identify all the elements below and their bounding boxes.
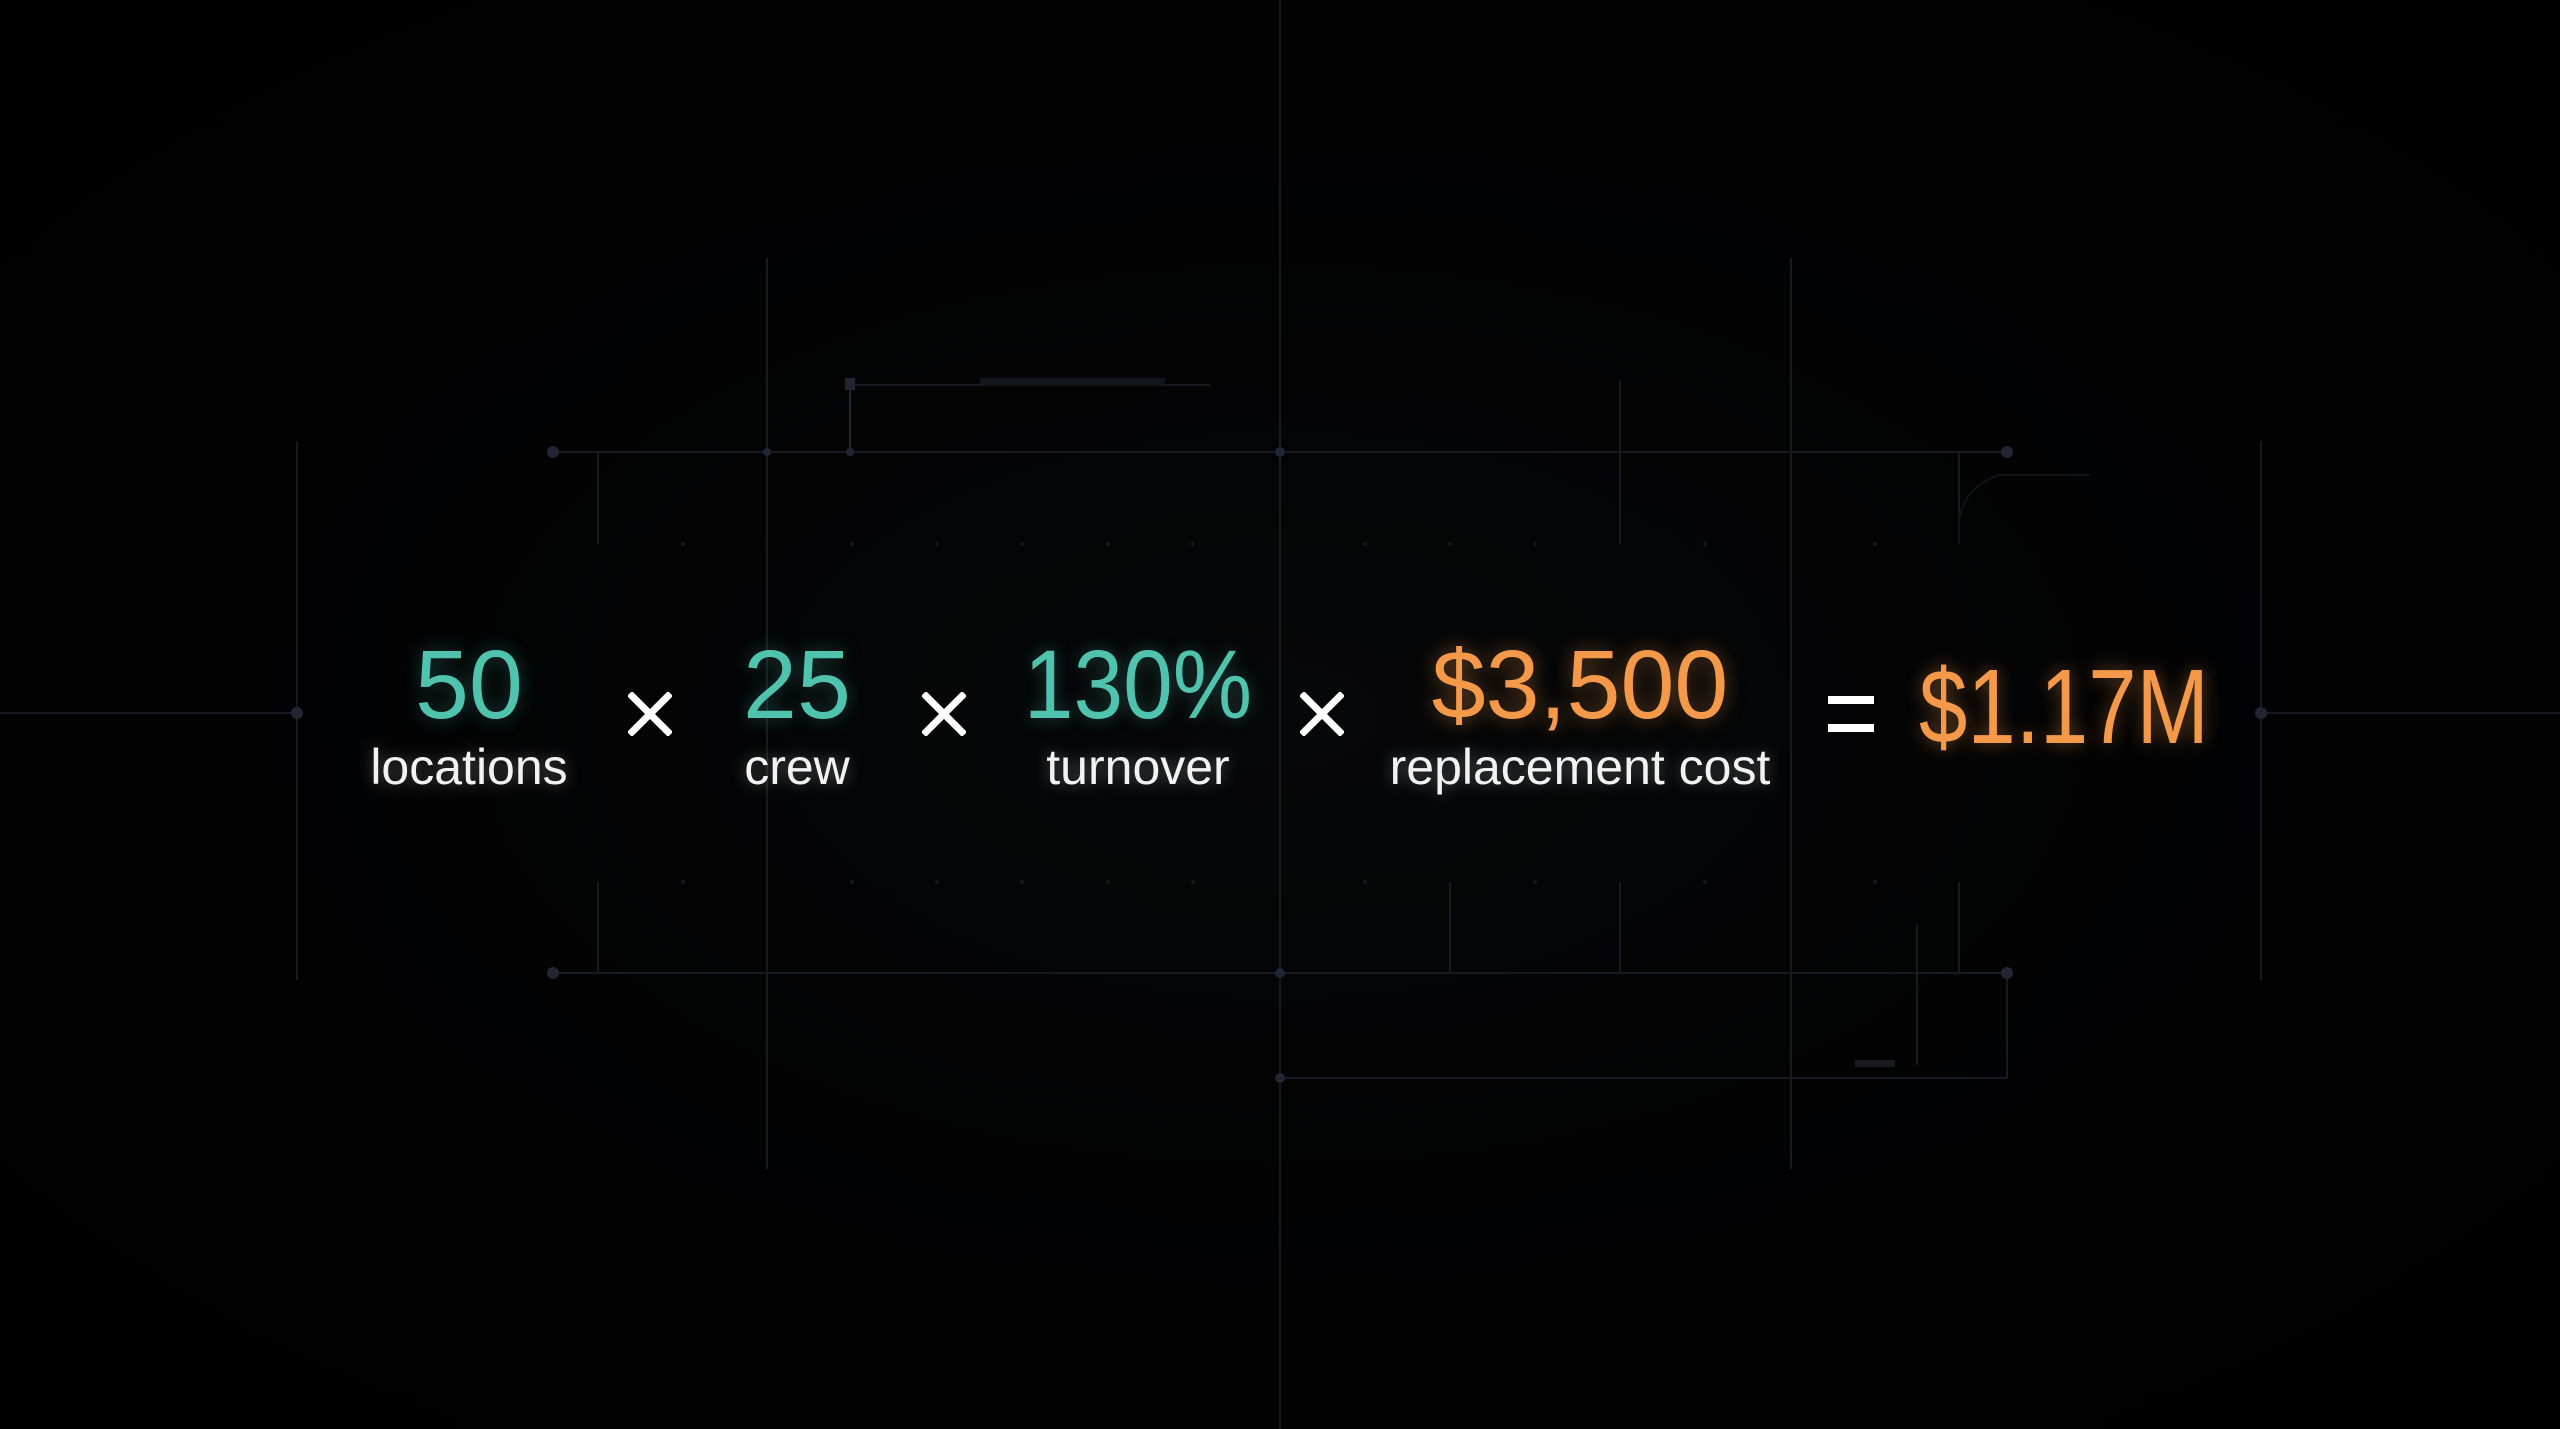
number 50: 50 xyxy=(415,630,523,739)
label turnover: turnover xyxy=(1046,739,1230,795)
label crew: crew xyxy=(744,739,850,795)
term: $3,500 replacement cost xyxy=(1386,630,1774,796)
number $3,500: $3,500 xyxy=(1432,630,1728,739)
label locations: locations xyxy=(370,739,568,795)
number 25: 25 xyxy=(743,630,851,739)
operator: times 3 xyxy=(1300,692,1344,736)
number 130%: 130% xyxy=(1024,630,1252,739)
term: 25 crew xyxy=(740,630,854,795)
result: $1.17M: $1.17M xyxy=(1919,648,2209,766)
term: 130% turnover xyxy=(1024,630,1256,795)
operator: times 2 xyxy=(922,692,966,736)
operator: equals xyxy=(1828,696,1874,732)
label replacement cost: replacement cost xyxy=(1390,739,1770,795)
operator: times 1 xyxy=(628,692,672,736)
term: 50 locations xyxy=(366,630,571,795)
